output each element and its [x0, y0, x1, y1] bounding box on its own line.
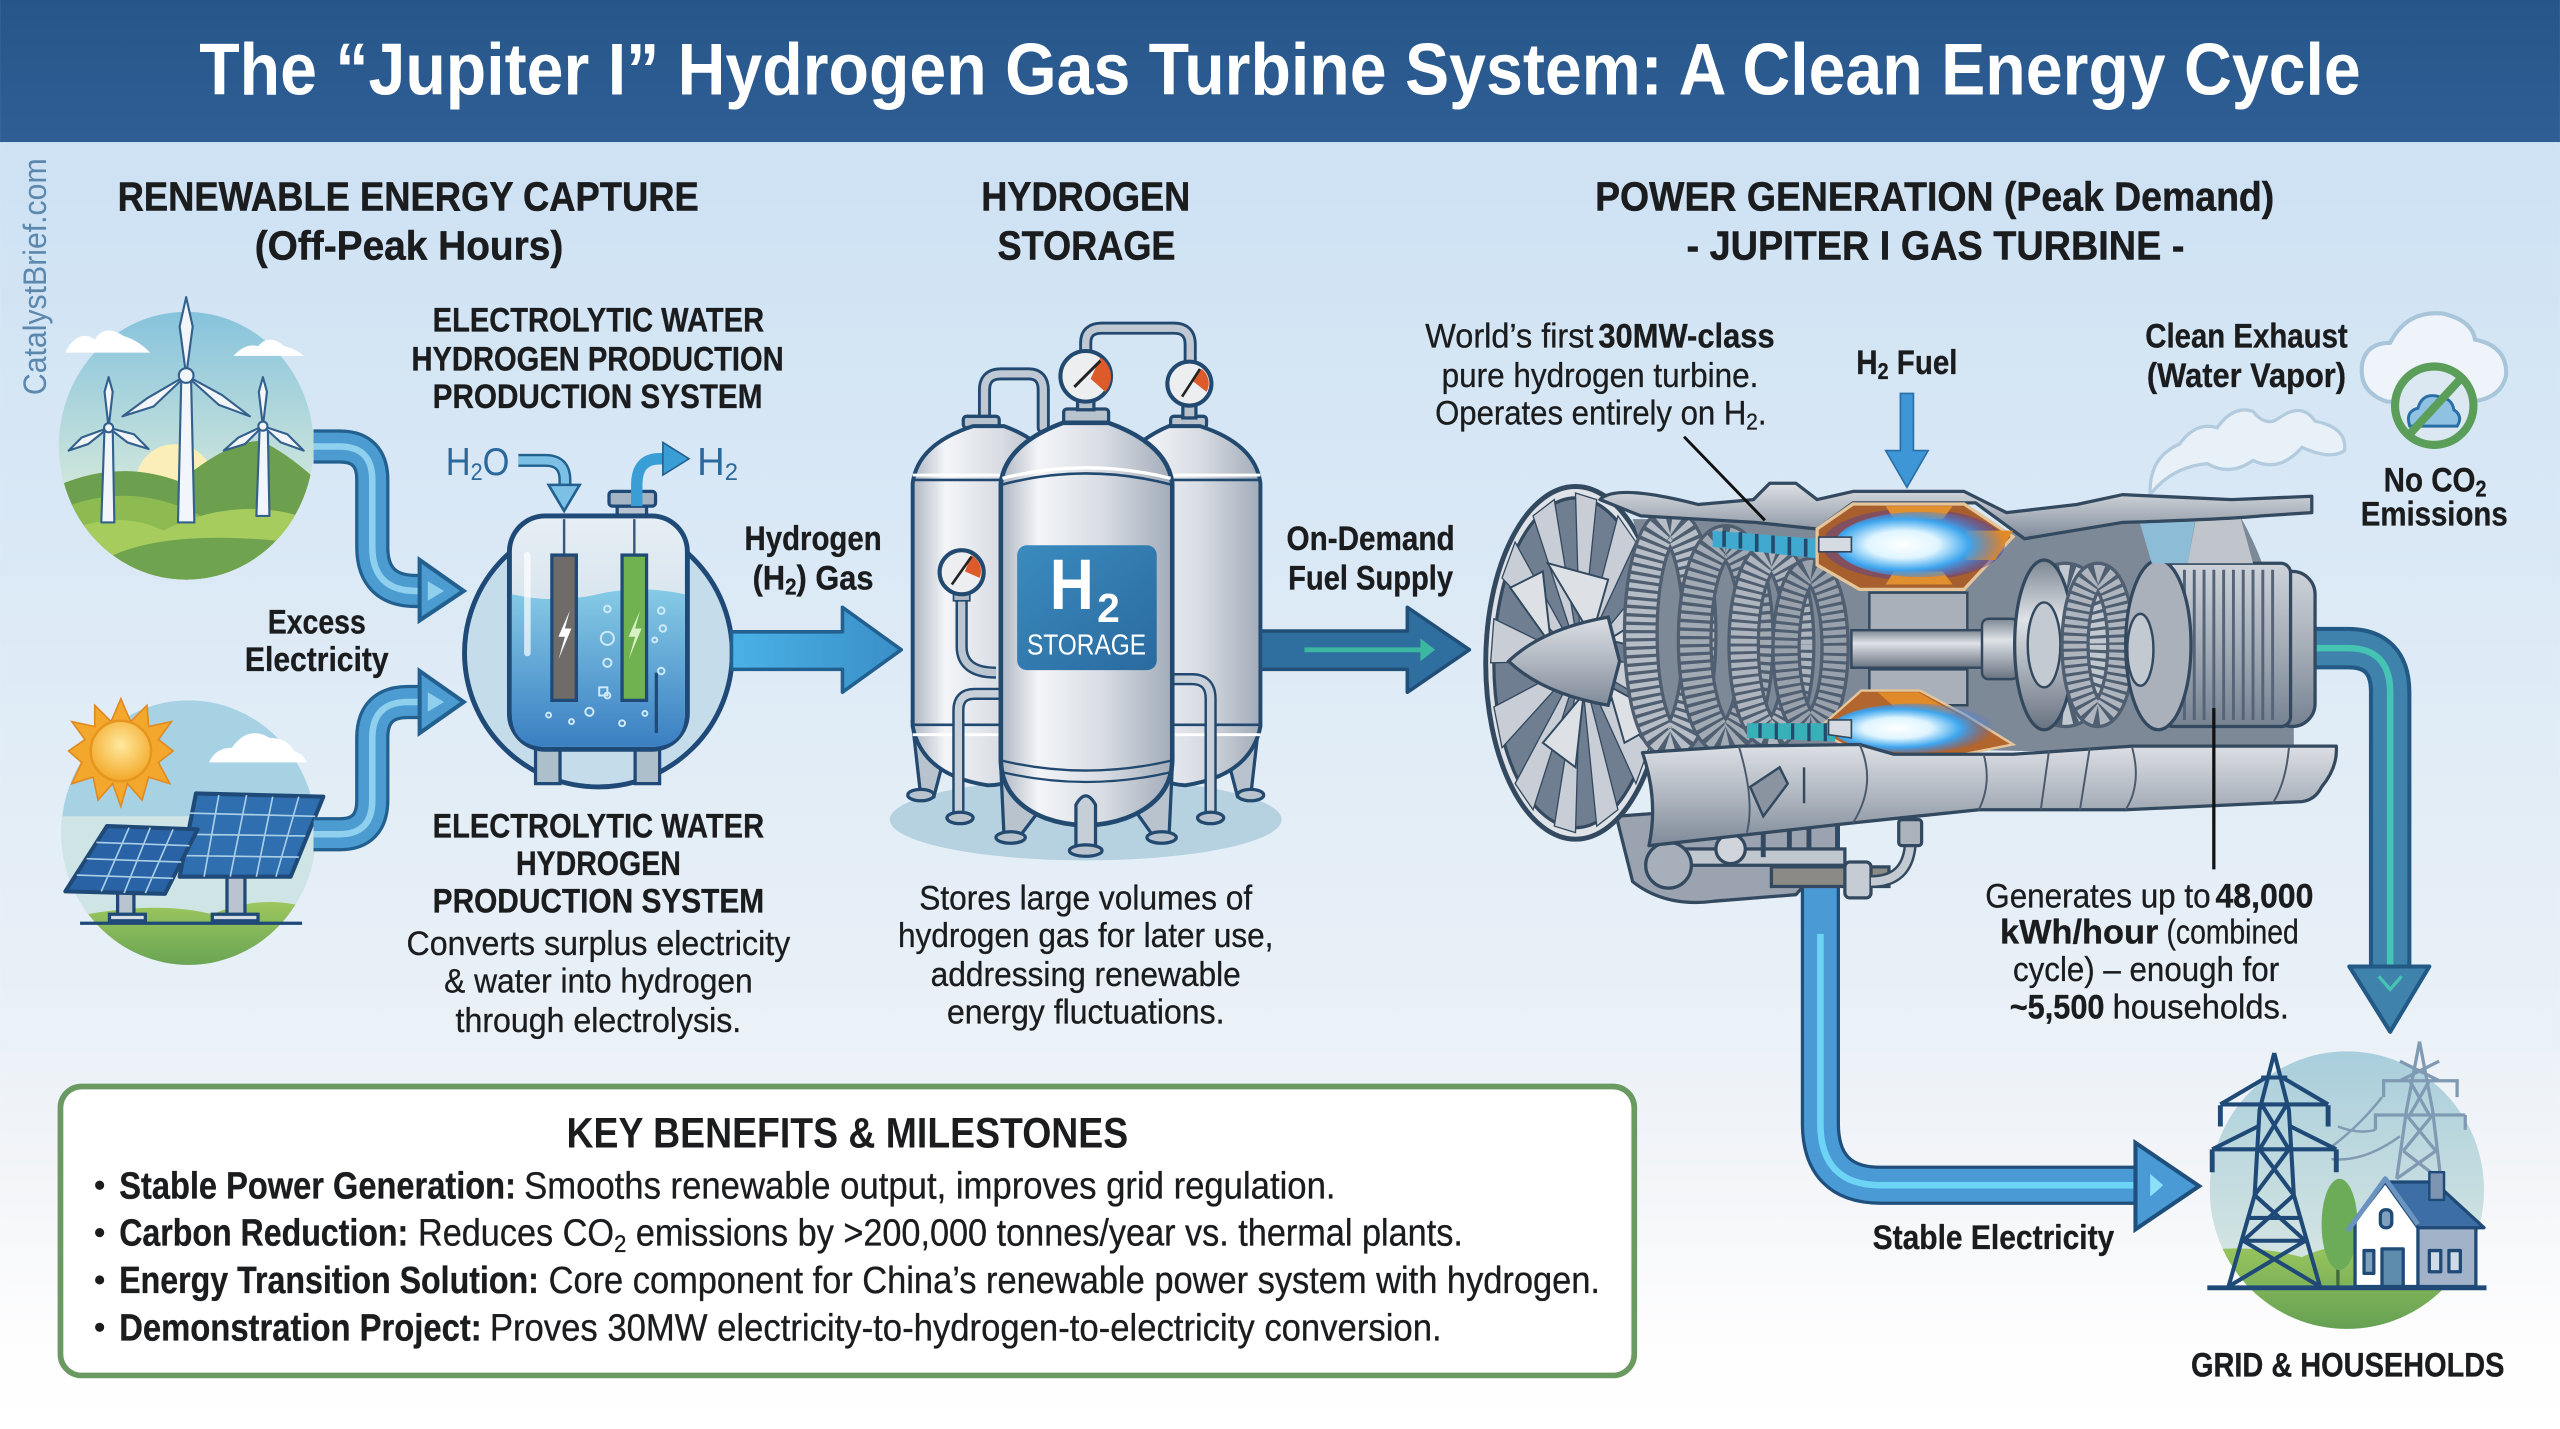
label: H2 output: 2: [725, 459, 738, 486]
text: electrolytic system description: HYDROGEN: [516, 845, 681, 883]
text: storage description: energy fluctuations.: [947, 994, 1224, 1032]
heading: renewable energy capture: RENEWABLE ENERGY CAPTURE: [118, 174, 699, 220]
label: excess electricity: Excess: [268, 603, 366, 641]
text: turbine callout: 30MW-class: [1598, 318, 1775, 356]
label: hydrogen gas: (H: [753, 559, 789, 597]
label: excess electricity: Electricity: [245, 641, 389, 679]
panel: key benefits and milestones: [60, 1086, 1634, 1375]
heading: hydrogen storage: HYDROGEN: [981, 174, 1190, 220]
benefit: energy transition solution: Core component for China’s renewable power system with hydrogen.: [549, 1259, 1600, 1301]
icon: side gauge: [940, 550, 984, 601]
label: grid and households: GRID & HOUSEHOLDS: [2191, 1346, 2504, 1384]
arrow: hydrogen gas to storage: [731, 607, 901, 692]
icon: solar panels with sun: [49, 699, 327, 980]
title: The “Jupiter I” Hydrogen Gas Turbine System: A Clean Energy Cycle: [199, 28, 2361, 111]
text: power output callout: [1985, 878, 2313, 1027]
benefit: stable power generation: [95, 1164, 1336, 1206]
text: turbine callout: [1425, 318, 1775, 434]
text: power output callout: 48,000: [2215, 878, 2313, 916]
benefit: energy transition solution: Energy Transition Solution:: [119, 1259, 539, 1301]
icon: sun: [69, 699, 173, 806]
label: H2 fuel: 2: [1878, 358, 1889, 384]
label: on-demand fuel supply: On-Demand: [1287, 520, 1455, 558]
arrow: H2 fuel: [1886, 393, 1928, 487]
benefit: carbon reduction: Reduces CO: [418, 1212, 633, 1254]
watermark: CatalystBrief.com: [16, 158, 53, 395]
text: turbine callout: 2: [1746, 408, 1758, 434]
text: power output callout: cycle) – enough for: [2013, 951, 2279, 989]
label: hydrogen gas: ) Gas: [797, 559, 873, 597]
fan: [1486, 487, 1669, 839]
upper compressor blades highlight: [1713, 531, 1817, 558]
heading: renewable energy capture: [118, 174, 699, 269]
upper combustor: [1817, 504, 2013, 589]
label: excess electricity: [245, 603, 389, 679]
icon: tree: [2322, 1179, 2358, 1286]
callout line: hydrogen turbine: [1684, 437, 1765, 520]
text: power output callout: households.: [2113, 989, 2289, 1027]
benefit: carbon reduction: emissions by >200,000 tonnes/year vs. thermal plants.: [626, 1212, 1463, 1254]
heading: electrolytic system top: [411, 301, 784, 416]
text: power output callout: (combined: [2166, 914, 2299, 952]
icon: no CO2 cloud: [2362, 313, 2506, 445]
shaft: [1851, 593, 2018, 705]
label: H2O input: 2: [471, 459, 483, 486]
arrow: stable electricity to grid: [1820, 800, 2199, 1229]
generator: [2126, 560, 2315, 730]
arrow: H2O into electrolyser: [518, 460, 580, 511]
heading: power generation: - JUPITER I GAS TURBINE -: [1687, 223, 2184, 269]
text: power output callout: ~5,500: [2010, 989, 2104, 1027]
text: electrolytic system description: & water into hydrogen: [444, 963, 753, 1001]
benefit: demonstration project: Proves 30MW electricity-to-hydrogen-to-electricity conversion.: [490, 1306, 1442, 1348]
text: turbine callout: World’s first: [1425, 318, 1594, 356]
icon: house: [2348, 1172, 2484, 1286]
label: no CO2 emissions: Emissions: [2361, 496, 2508, 534]
turbine stage discs: [2015, 560, 2121, 730]
label: clean exhaust: [2145, 318, 2348, 395]
heading: electrolytic system top: ELECTROLYTIC WATER: [433, 301, 764, 339]
text: power output callout: Generates up to: [1985, 878, 2211, 916]
text: turbine callout: Operates entirely on H: [1435, 394, 1778, 432]
icon: wind turbines: [58, 296, 314, 580]
icon: hydrogen storage tanks: [890, 328, 1282, 860]
top casing: [1600, 483, 2312, 539]
icon: main pylon: [2212, 1053, 2336, 1286]
exhaust vapor inside casing: [2139, 516, 2196, 563]
arrow: generator output to grid: [2310, 648, 2429, 1032]
diagram: Jupiter I gas turbine: [1486, 437, 2336, 902]
label: H2 output: H: [697, 441, 725, 484]
benefit: carbon reduction: Carbon Reduction:: [119, 1212, 408, 1254]
icon: grid and households: [2204, 1042, 2498, 1339]
text: electrolytic system description: ELECTROLYTIC WATER: [433, 808, 764, 846]
storage label plate: [1017, 545, 1157, 670]
text: electrolytic system description: through electrolysis.: [456, 1002, 741, 1040]
icon: top gauge: [1060, 351, 1111, 402]
benefit: demonstration project: Demonstration Project:: [119, 1306, 482, 1348]
label: H2 fuel: Fuel: [1889, 344, 1958, 382]
benefit: energy transition solution: [95, 1259, 1600, 1301]
benefit: demonstration project: [95, 1306, 1442, 1348]
text: turbine callout: pure hydrogen turbine.: [1442, 357, 1758, 395]
arrow: wind excess electricity: [314, 447, 464, 620]
label: hydrogen gas: [745, 520, 882, 599]
benefit: carbon reduction: 2: [614, 1231, 626, 1258]
text: storage description: [898, 879, 1273, 1032]
heading: hydrogen storage: STORAGE: [998, 223, 1176, 269]
label: stable electricity: Stable Electricity: [1873, 1219, 2114, 1257]
icon: rear pylon: [2328, 1042, 2465, 1179]
label: on-demand fuel supply: [1287, 520, 1455, 597]
label: no CO2 emissions: [2361, 461, 2508, 534]
heading: power generation: POWER GENERATION (Peak Demand): [1595, 174, 2274, 220]
icon: water vapor cloud: [2150, 410, 2345, 495]
heading: renewable energy capture: (Off-Peak Hours): [255, 223, 563, 269]
label: hydrogen gas: 2: [785, 573, 797, 599]
heading: hydrogen storage: [981, 174, 1190, 269]
label: H2O input: H: [446, 441, 474, 484]
label: on-demand fuel supply: Fuel Supply: [1288, 559, 1453, 597]
storage label plate: STORAGE: [1027, 630, 1146, 662]
storage label plate: H: [1050, 545, 1094, 625]
label: clean exhaust: Clean Exhaust: [2145, 318, 2348, 356]
label: H2 fuel: H: [1856, 344, 1881, 382]
heading: power generation: [1595, 174, 2274, 269]
icon: electrolyser: [465, 491, 732, 787]
compressor stages: [1641, 526, 1835, 741]
icon: right gauge: [1167, 362, 1211, 406]
lower combustor: [1747, 691, 2013, 754]
heading: electrolytic system top: PRODUCTION SYSTEM: [433, 378, 762, 416]
text: electrolytic system description: Converts surplus electricity: [407, 925, 791, 963]
text: storage description: hydrogen gas for later use,: [898, 917, 1273, 955]
label: clean exhaust: (Water Vapor): [2147, 357, 2346, 395]
text: electrolytic system description: PRODUCTION SYSTEM: [433, 883, 764, 921]
text: electrolytic system description: [407, 808, 791, 1040]
text: storage description: addressing renewable: [931, 956, 1241, 994]
callout line: generation output: [2213, 708, 2215, 869]
arrow: H2 out of electrolyser: [637, 442, 689, 506]
arrow: fuel supply to turbine: [1260, 607, 1469, 692]
label: no CO2 emissions: No CO: [2384, 461, 2490, 499]
benefit: stable power generation: Stable Power Generation:: [119, 1164, 516, 1206]
label: H2O input: O: [483, 441, 509, 484]
storage label plate: 2: [1097, 585, 1120, 631]
text: power output callout: kWh/hour: [2000, 914, 2158, 952]
text: turbine callout: .: [1758, 394, 1767, 432]
header banner: [0, 0, 2560, 142]
text: storage description: Stores large volumes of: [919, 879, 1253, 917]
benefit: carbon reduction: [95, 1212, 1463, 1258]
lower casing: [1642, 744, 2336, 846]
heading: electrolytic system top: HYDROGEN PRODUCTION: [411, 341, 784, 379]
label: no CO2 emissions: 2: [2476, 475, 2486, 501]
benefit: stable power generation: Smooths renewable output, improves grid regulation.: [524, 1164, 1336, 1206]
arrow: solar excess electricity: [314, 671, 464, 834]
inner casing background: [1633, 516, 2294, 754]
label: hydrogen gas: Hydrogen: [745, 520, 882, 558]
lower accessories: [1616, 759, 1922, 902]
panel heading: KEY BENEFITS & MILESTONES: [567, 1110, 1128, 1157]
